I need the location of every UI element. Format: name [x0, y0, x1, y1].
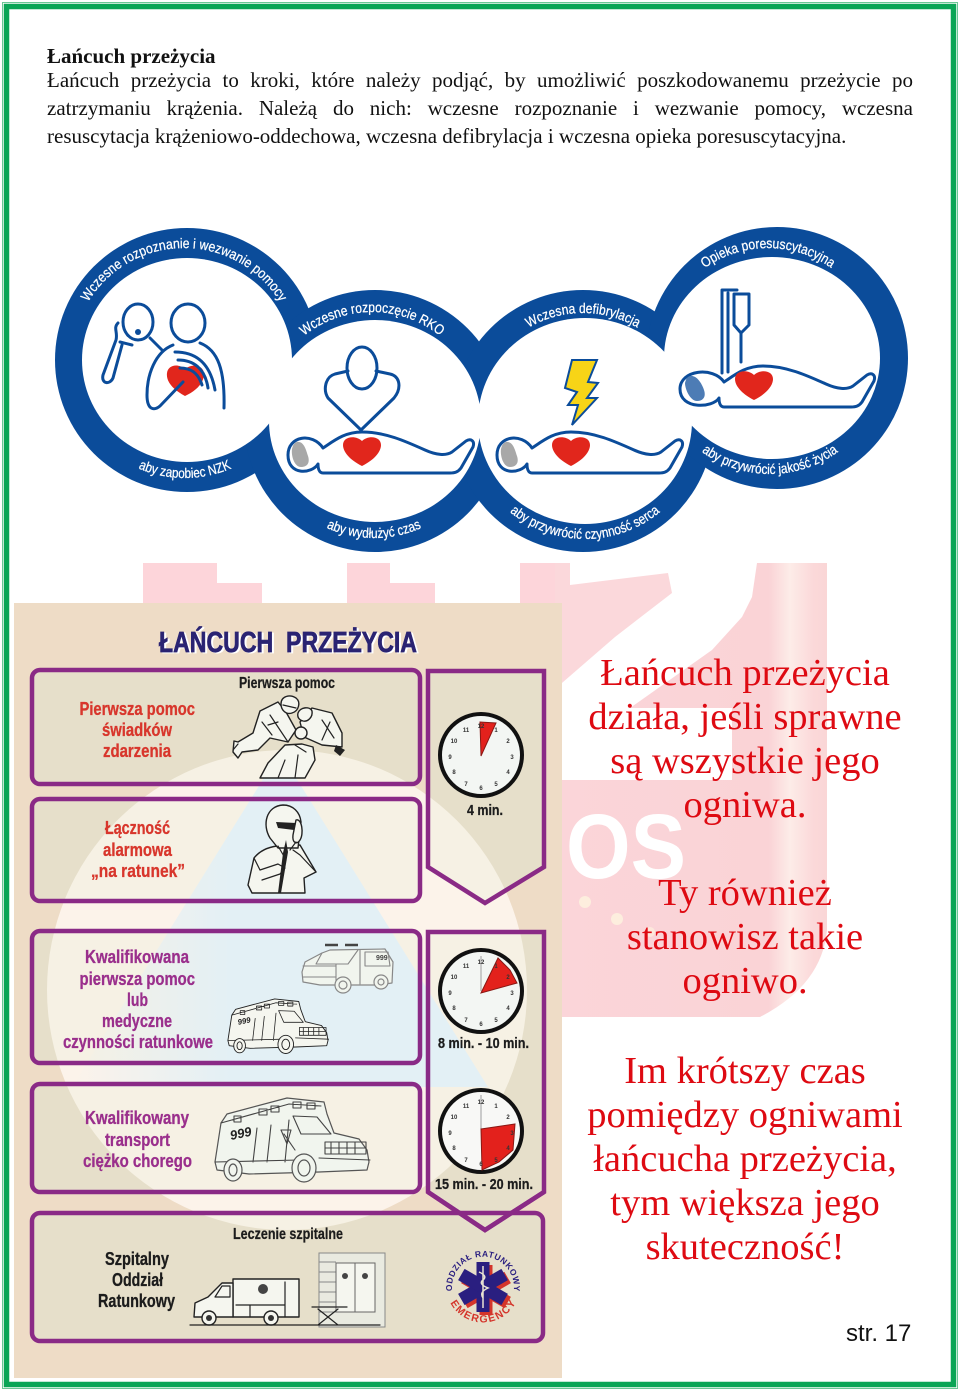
- icon: ambulance small: 999: [237, 1015, 252, 1027]
- advanced first aid label: Kwalifikowana: [85, 947, 190, 967]
- clock: 4 minutes: 12: [478, 724, 485, 730]
- clock: 15-20 minutes: 12: [478, 1100, 485, 1106]
- clock: 8-10 minutes: 2: [506, 975, 510, 981]
- clock: 4 minutes: 7: [464, 782, 468, 788]
- clock: 15-20 minutes: 5: [494, 1158, 498, 1164]
- icon: emergency department logo: ODDZIAŁ RATUNKOWY: [446, 1250, 520, 1292]
- emergency call label: „na ratunek”: [91, 861, 185, 881]
- ring captions: aby przywrócić jakość życia: [702, 446, 838, 477]
- clock: 15-20 minutes: 4: [506, 1146, 510, 1152]
- first aid caption: Pierwsza pomoc: [239, 675, 335, 692]
- ring captions: Wczesne rozpoczęcie RKO: [298, 304, 444, 334]
- advanced first aid label: lub: [127, 990, 148, 1010]
- advanced first aid label: pierwsza pomoc: [80, 969, 195, 989]
- chain of survival diagram: [55, 227, 908, 552]
- clock: 8-10 minutes: 8: [452, 1006, 456, 1012]
- hospital label: [98, 1249, 175, 1311]
- clock: 8-10 minutes: 6: [479, 1022, 483, 1028]
- clock: 15-20 minutes: 6: [479, 1162, 483, 1168]
- icon: caller and patient with heart: [103, 304, 224, 409]
- clock: 8-10 minutes: [440, 950, 522, 1032]
- ring captions: Opieka poresuscytacyjna: [701, 240, 834, 268]
- clock: 4 minutes: 6: [479, 786, 483, 792]
- emergency call label: Łączność: [105, 818, 170, 838]
- ring captions: [80, 238, 838, 542]
- clock: 15-20 minutes: 8: [452, 1146, 456, 1152]
- clock: 8-10 minutes: 12: [478, 960, 485, 966]
- icon: rapid response van: [302, 945, 393, 993]
- emergency call label: alarmowa: [103, 840, 173, 860]
- ring captions: Wczesna defibrylacja: [524, 302, 640, 328]
- clock: 15-20 minutes: 3: [510, 1131, 514, 1137]
- clock: 15-20 minutes: 2: [506, 1115, 510, 1121]
- page number: str. 17: [846, 1320, 911, 1347]
- icon: ambulance at hospital entrance: [190, 1253, 385, 1327]
- icon: ambulance small: [228, 999, 329, 1054]
- clock: 4 minutes: 1: [494, 728, 498, 734]
- icon: defibrillation bolt and patient: [497, 360, 683, 473]
- clock: 8-10 minutes: 11: [463, 964, 470, 970]
- clock: 4 minutes: 10: [451, 739, 458, 745]
- advanced first aid label: czynności ratunkowe: [63, 1032, 213, 1052]
- clock: 15-20 minutes: 11: [463, 1104, 470, 1110]
- icon: person phoning: [248, 805, 316, 893]
- icon: emergency department logo: EMERGENCY: [450, 1299, 514, 1322]
- panel: hospital: [30, 1190, 546, 1344]
- red message: chain works: Łańcuch przeżycia: [600, 652, 890, 694]
- intro heading: Łańcuch przeżycia: [47, 44, 216, 68]
- red message: shorter time: pomiędzy ogniwami: [587, 1094, 903, 1136]
- faded background SOS image: OS: [566, 796, 686, 898]
- red message: you are a link: ogniwo.: [682, 960, 808, 1002]
- clock: 4 minutes: 4: [506, 770, 510, 776]
- red message: chain works: działa, jeśli sprawne: [588, 696, 902, 738]
- icon: IV drip and patient: [680, 290, 875, 407]
- icon: rapid response van: 999: [376, 955, 388, 962]
- clock: 4 minutes: 8: [452, 770, 456, 776]
- qualified transport label: ciężko chorego: [83, 1151, 192, 1171]
- clock: 4 minutes: 9: [448, 755, 452, 761]
- red message: shorter time: Im krótszy czas: [624, 1050, 866, 1092]
- red message: you are a link: [627, 872, 863, 1002]
- clock: 8-10 minutes: 9: [448, 991, 452, 997]
- clock: 15-20 minutes: 10: [451, 1115, 458, 1121]
- icon: emergency department logo: [446, 1250, 520, 1322]
- red message: you are a link: stanowisz takie: [627, 916, 863, 958]
- hospital label: Ratunkowy: [98, 1291, 175, 1311]
- red message: chain works: ogniwa.: [684, 784, 806, 826]
- intro text block: zatrzymaniu krążenia. Należą do nich: wczesne rozpoznanie i wezwanie pomocy, wczesna: [47, 96, 913, 120]
- clock: 15-20 minutes: [440, 1090, 522, 1172]
- intro text block: [47, 44, 913, 148]
- clock: 4 minutes: 3: [510, 755, 514, 761]
- first aid label: Pierwsza pomoc: [80, 699, 195, 719]
- panel: clocks column two: [428, 932, 544, 1230]
- clock: 4 minutes: 5: [494, 782, 498, 788]
- poster title: ŁAŃCUCH PRZEŻYCIA: [159, 625, 417, 659]
- qualified transport label: Kwalifikowany: [85, 1108, 189, 1128]
- first aid label: [80, 699, 195, 761]
- red message: you are a link: Ty również: [658, 872, 832, 914]
- clock: 15-20 minutes: 1: [494, 1104, 498, 1110]
- label: 4 min: 4 min.: [467, 802, 503, 819]
- intro text block: resuscytacja krążeniowo-oddechowa, wczesna defibrylacja i wczesna opieka poresuscytacyjna.: [47, 124, 846, 148]
- red message: chain works: są wszystkie jego: [610, 740, 880, 782]
- ring captions: aby zapobiec NZK: [139, 459, 232, 480]
- advanced first aid label: [63, 947, 213, 1052]
- qualified transport label: transport: [105, 1130, 170, 1150]
- ring captions: Wczesne rozpoznanie i wezwanie pomocy: [80, 238, 286, 300]
- clock: 15-20 minutes: 7: [464, 1158, 468, 1164]
- clock: 8-10 minutes: 10: [451, 975, 458, 981]
- hospital label: Szpitalny: [105, 1249, 169, 1269]
- poster background circle and cone: [47, 750, 527, 1230]
- clock: 4 minutes: [440, 714, 522, 796]
- clock: 8-10 minutes: 1: [494, 964, 498, 970]
- blue linked rings: [55, 227, 908, 552]
- label: 15-20 minutes: 15 min. - 20 min.: [435, 1176, 533, 1193]
- clock: 8-10 minutes: 3: [510, 991, 514, 997]
- label: 8-10 minutes: 8 min. - 10 min.: [438, 1035, 529, 1052]
- panel: advanced first aid: [32, 931, 420, 1063]
- hospital caption: Leczenie szpitalne: [233, 1226, 343, 1243]
- red message: chain works: [588, 652, 902, 826]
- icon: ambulance large: [215, 1098, 370, 1182]
- panel: time column one: [428, 671, 544, 903]
- faded background SOS image: [143, 563, 827, 1017]
- ring captions: aby przywrócić czynność serca: [510, 507, 660, 542]
- first aid label: zdarzenia: [103, 741, 172, 761]
- red message: shorter time: [587, 1050, 903, 1268]
- clock: 4 minutes: 11: [463, 728, 470, 734]
- ring captions: aby wydłużyć czas: [327, 520, 421, 540]
- intro text block: Łańcuch przeżycia to kroki, które należy podjąć, by umożliwić poszkodowanemu przeżycie po: [47, 68, 913, 92]
- hospital label: Oddział: [112, 1270, 163, 1290]
- qualified transport label: [83, 1108, 192, 1171]
- advanced first aid label: medyczne: [102, 1011, 172, 1031]
- icon: ambulance large: 999: [229, 1124, 254, 1143]
- clock: 8-10 minutes: 5: [494, 1018, 498, 1024]
- first aid label: świadków: [102, 720, 173, 740]
- red message: shorter time: tym większa jego: [610, 1182, 880, 1224]
- icon: rescuers with victim: [233, 696, 345, 778]
- icon: CPR rescuer and patient: [288, 347, 474, 473]
- poster: chain of survival: [14, 603, 562, 1378]
- clock: 4 minutes: 2: [506, 739, 510, 745]
- clock: 15-20 minutes: 9: [448, 1131, 452, 1137]
- panel: first aid: [32, 670, 420, 784]
- red message: shorter time: skuteczność!: [646, 1226, 844, 1268]
- emergency call label: [91, 818, 185, 881]
- panel: emergency call: [32, 799, 420, 901]
- red message: shorter time: łańcucha przeżycia,: [593, 1138, 897, 1180]
- panel: qualified transport: [32, 1084, 420, 1192]
- clock: 8-10 minutes: 7: [464, 1018, 468, 1024]
- clock: 8-10 minutes: 4: [506, 1006, 510, 1012]
